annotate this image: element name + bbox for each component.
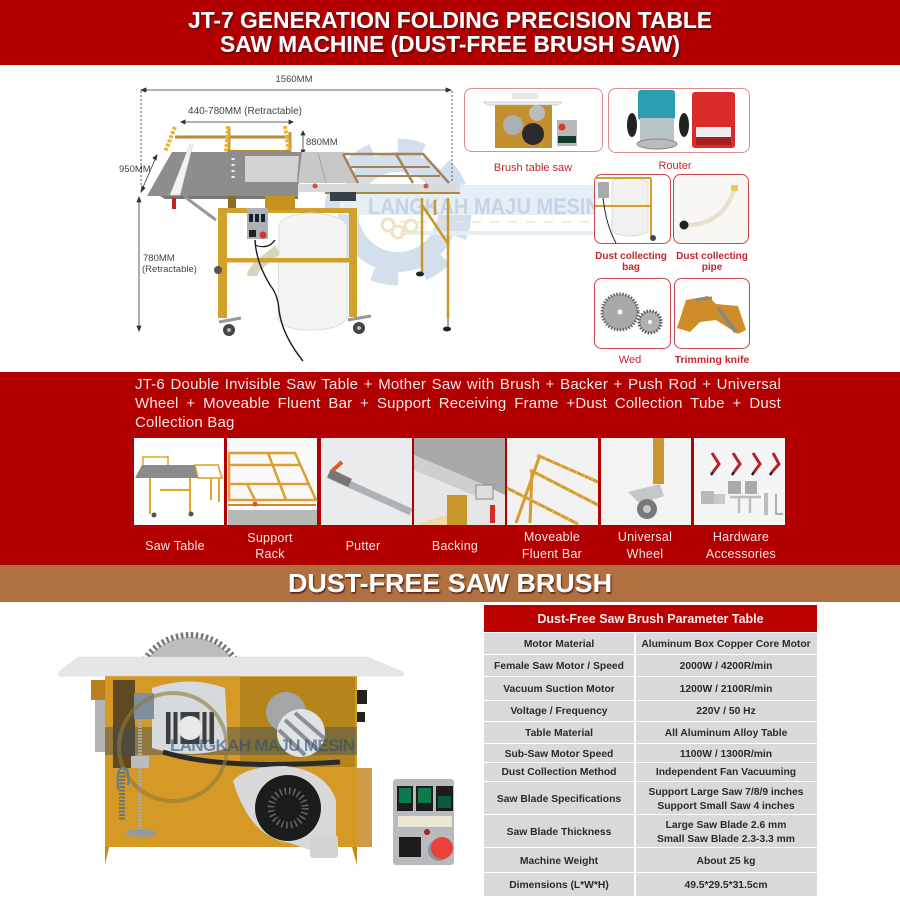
parameter table: Dust-Free Saw Brush Parameter Table — [537, 612, 764, 626]
parameter names: Saw Blade Thickness — [507, 827, 612, 838]
parameter names: Female Saw Motor / Speed — [494, 661, 624, 672]
section band: dust-free saw brush — [0, 565, 900, 602]
table title — [484, 605, 817, 632]
right motor — [266, 692, 325, 757]
photo: backing — [414, 438, 505, 525]
dimension labels: 780MM — [143, 253, 175, 264]
title: SAW MACHINE (DUST-FREE BRUSH SAW) — [220, 31, 680, 57]
title — [188, 7, 712, 57]
label: dust collecting pipe: pipe — [702, 262, 723, 273]
parameter values: Aluminum Box Copper Core Motor — [641, 639, 811, 650]
rear sliding frame — [165, 126, 290, 152]
machine housing — [91, 676, 372, 865]
accessory: saw blades — [594, 278, 670, 348]
table rows — [484, 633, 817, 896]
parameter values: All Aluminum Alloy Table — [665, 728, 788, 739]
parameter names: Table Material — [525, 728, 593, 739]
panel: included parts band — [0, 372, 900, 565]
photo: moveable fluent bar — [507, 438, 598, 525]
part labels: Accessories — [706, 547, 776, 561]
parameter values: 1200W / 2100R/min — [680, 684, 772, 695]
parameter names: Voltage / Frequency — [510, 706, 608, 717]
label: brush table saw: Brush table saw — [494, 162, 572, 174]
parameter names: Dust Collection Method — [502, 767, 616, 778]
blower housing and fan — [233, 766, 338, 858]
watermark overlay — [119, 693, 355, 801]
label: dust collecting pipe: Dust collecting — [676, 251, 748, 262]
photo: putter — [321, 438, 412, 525]
parameter values: 1100W / 1300R/min — [680, 749, 772, 760]
part labels: Saw Table — [145, 539, 205, 553]
label: dust collecting bag — [595, 251, 667, 273]
parameter names: Vacuum Suction Motor — [503, 684, 615, 695]
extension frame — [343, 154, 449, 183]
parameter values: 220V / 50 Hz — [696, 706, 756, 717]
dimension labels: 440-780MM (Retractable) — [188, 106, 302, 117]
power cable — [255, 240, 303, 361]
title: JT-7 GENERATION FOLDING PRECISION TABLE — [188, 7, 712, 33]
saw table top — [147, 144, 358, 199]
parameter values: 2000W / 4200R/min — [680, 661, 772, 672]
parameter names — [494, 639, 624, 891]
parameter names: Motor Material — [524, 639, 594, 650]
accessory: brush table saw — [464, 88, 602, 152]
section band: dust-free saw brush: DUST-FREE SAW BRUSH — [288, 568, 612, 598]
dimension labels: 880MM — [306, 137, 338, 148]
dimension labels: (Retractable) — [142, 264, 197, 275]
part labels: Hardware — [713, 530, 769, 544]
photo: universal wheel — [601, 438, 691, 525]
large saw unit illustration — [59, 635, 454, 865]
parameter values: 49.5*29.5*31.5cm — [684, 880, 768, 891]
included parts description: Wheel + Moveable Fluent Bar + Support Receiving Frame +Dust Collection Tube + Dust — [135, 395, 781, 412]
dust collection bag — [278, 213, 347, 330]
parameter values: About 25 kg — [697, 856, 755, 867]
label: wed: Wed — [619, 354, 641, 366]
accessory: dust collecting pipe — [674, 174, 748, 244]
header banner — [0, 0, 900, 65]
saw stand — [185, 196, 357, 318]
watermark gear: LANGKAH MAJU MESIN — [368, 194, 600, 219]
accessory: dust collecting bag — [594, 174, 670, 244]
main machine diagram — [119, 74, 460, 361]
label: router: Router — [658, 160, 692, 172]
parameter values: Large Saw Blade 2.6 mm — [666, 820, 786, 831]
casters — [214, 266, 371, 336]
accessory: router — [608, 88, 750, 152]
accessory: trimming knife — [674, 278, 750, 348]
label: dust collecting pipe — [676, 251, 748, 273]
dimension labels: 950MM — [119, 164, 151, 175]
control panel — [393, 779, 454, 865]
part labels: Universal — [618, 530, 672, 544]
belt — [163, 752, 340, 764]
photo: hardware accessories — [694, 438, 785, 525]
parameter names: Dimensions (L*W*H) — [509, 880, 609, 891]
parameter values: Support Large Saw 7/8/9 inches — [648, 787, 804, 798]
part labels: Fluent Bar — [522, 547, 582, 561]
folding legs — [416, 198, 451, 332]
photo: support rack — [227, 438, 317, 525]
control box — [247, 208, 268, 239]
part labels: Support — [247, 531, 293, 545]
included parts description: JT-6 Double Invisible Saw Table + Mother Saw with Brush + Backer + Push Rod + Universal — [135, 376, 781, 393]
label: dust collecting bag: bag — [622, 262, 640, 273]
part labels: Putter — [346, 539, 380, 553]
parameter values — [641, 639, 811, 891]
dust collection hose — [252, 250, 278, 276]
label: dust collecting bag: Dust collecting — [595, 251, 667, 262]
long rail — [172, 184, 460, 209]
label: trimming knife: Trimming knife — [675, 354, 749, 366]
dimension lines — [137, 88, 452, 331]
dimension labels: 1560MM — [276, 74, 313, 85]
parameter names: Saw Blade Specifications — [497, 794, 621, 805]
part labels: Moveable — [524, 530, 580, 544]
included parts description — [135, 376, 781, 431]
parameter table — [484, 605, 817, 896]
photo: saw table — [134, 438, 224, 525]
stand lower bar — [227, 258, 349, 262]
parameter values: Small Saw Blade 2.3-3.3 mm — [657, 834, 795, 845]
lead screw and spring — [118, 720, 157, 837]
parameter names: Machine Weight — [520, 856, 599, 867]
left motor — [134, 682, 228, 754]
watermark overlay: LANGKAH MAJU MESIN — [170, 736, 355, 755]
saw blade — [143, 632, 237, 657]
included parts description: Collection Bag — [135, 414, 235, 431]
part labels: Wheel — [627, 547, 663, 561]
part labels — [145, 530, 776, 561]
saw table plate — [59, 657, 403, 676]
dimension labels — [119, 74, 338, 275]
watermark gear — [333, 147, 602, 277]
parameter values: Independent Fan Vacuuming — [656, 767, 796, 778]
part labels: Rack — [255, 547, 285, 561]
parameter names: Sub-Saw Motor Speed — [505, 749, 613, 760]
parameter values: Support Small Saw 4 inches — [657, 801, 795, 812]
part labels: Backing — [432, 539, 478, 553]
